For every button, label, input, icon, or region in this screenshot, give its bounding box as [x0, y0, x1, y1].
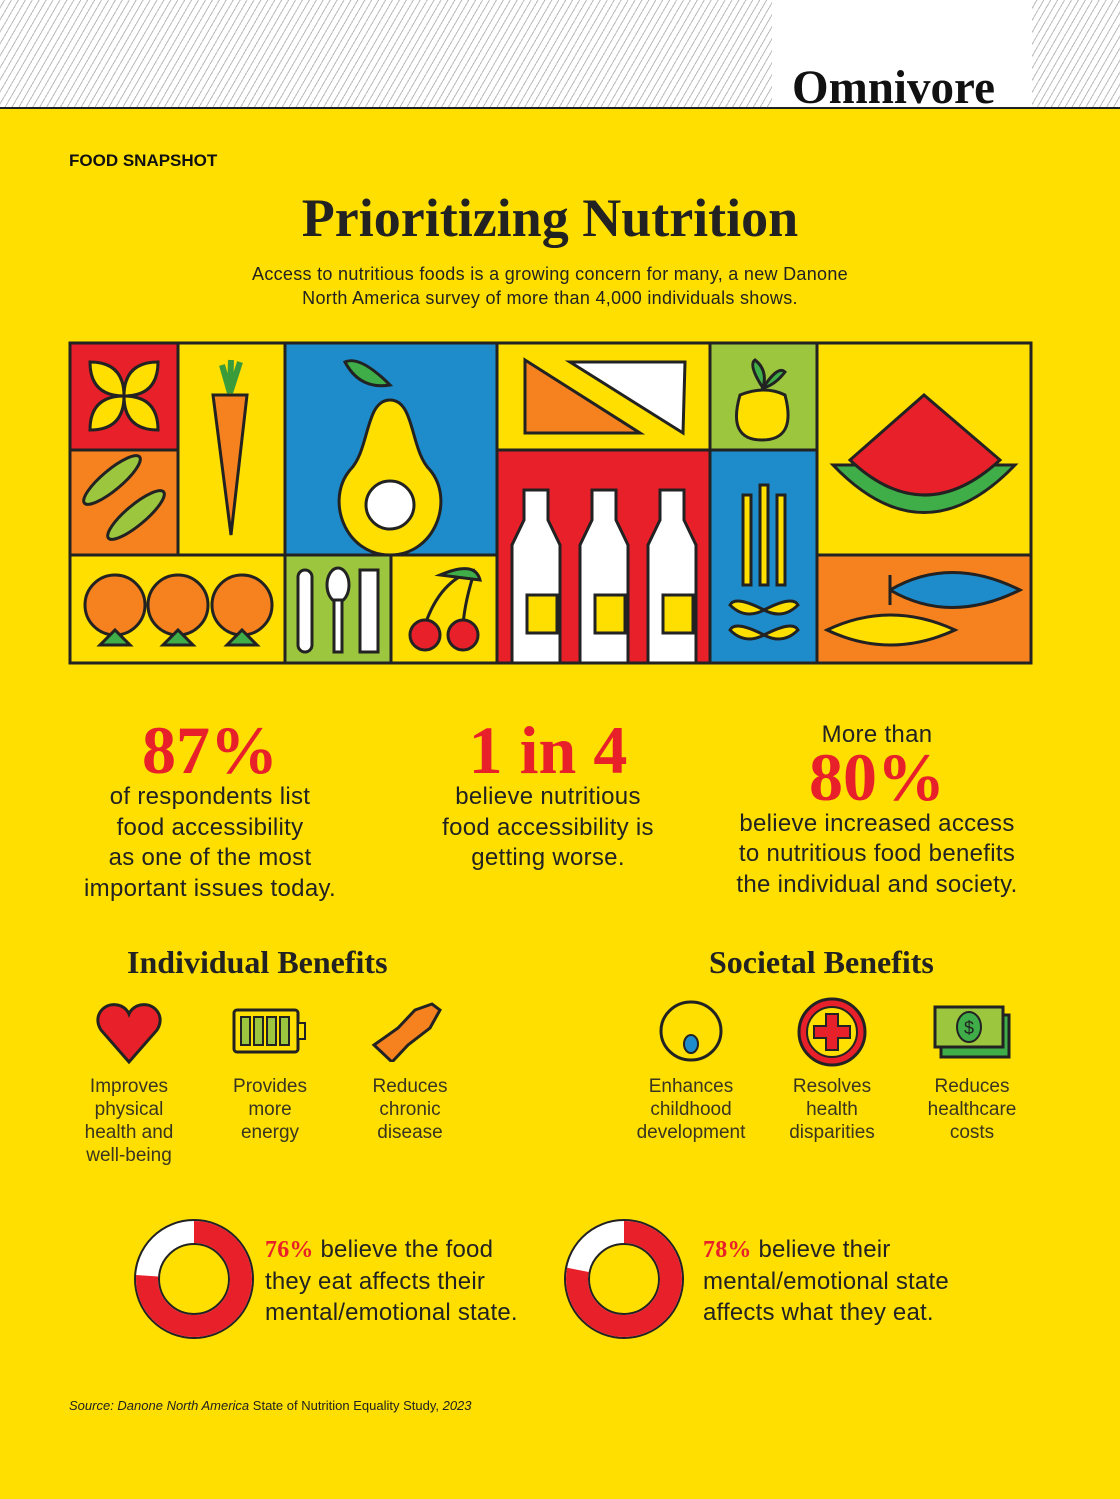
- heading: societal benefits: Societal Benefits: [709, 944, 934, 980]
- donut text 2: mental/emotional state: [703, 1268, 949, 1295]
- icon: battery: [232, 1008, 306, 1054]
- cheese: [525, 360, 640, 433]
- label: Improves physical health and well-being: [85, 1076, 173, 1166]
- icon: money: $: [964, 1018, 974, 1038]
- watermelon: [833, 465, 1015, 512]
- stat 3: More than: [822, 721, 932, 748]
- cherries: [425, 570, 475, 625]
- stat 2: [442, 712, 654, 871]
- bottles: [512, 490, 696, 663]
- title: Prioritizing Nutrition: [302, 188, 798, 248]
- label: Enhances childhood development: [637, 1076, 745, 1143]
- peas: [78, 449, 170, 546]
- label: Reduces chronic disease: [372, 1076, 448, 1143]
- source: Source: Danone North America State of Nutrition Equality Study, 2023: [69, 1398, 472, 1413]
- stat 3: 80%: [809, 738, 945, 814]
- label: Provides more energy: [233, 1076, 307, 1143]
- oranges: [85, 575, 272, 635]
- stat 1: food accessibility: [117, 814, 303, 840]
- carrot: [213, 395, 247, 535]
- icon: baby: [660, 1000, 722, 1062]
- stat 1: as one of the most: [109, 844, 311, 871]
- apple: [736, 390, 788, 440]
- label: Reduces healthcare costs: [928, 1076, 1016, 1143]
- stat 3: to nutritious food benefits: [739, 840, 1015, 867]
- stat 1: of respondents list: [110, 783, 310, 810]
- icon: medical cross: [798, 998, 866, 1066]
- label: Resolves health disparities: [789, 1076, 875, 1143]
- donut 76%: [134, 1219, 254, 1339]
- intro text: Access to nutritious foods is a growing concern for many, a new Danone North America survey of more than 4,000 individuals shows.: [252, 264, 848, 308]
- donut text 1: they eat affects their: [265, 1268, 485, 1295]
- donut text 1: [265, 1236, 518, 1326]
- food illustration grid: [68, 342, 1032, 664]
- stat 3: [736, 721, 1018, 898]
- utensils: [298, 568, 378, 652]
- stat 2: getting worse.: [471, 844, 625, 871]
- heading: individual benefits: Individual Benefits: [127, 944, 388, 980]
- masthead: Omnivore: [792, 61, 995, 114]
- pear: [339, 400, 441, 555]
- stat 2: 1 in 4: [469, 712, 627, 788]
- icon: hand: [372, 1002, 442, 1062]
- stat 3: believe increased access: [739, 810, 1015, 836]
- stat 1: 87%: [142, 712, 278, 788]
- stat 3: the individual and society.: [736, 870, 1018, 898]
- donut text 1: 76% believe the food: [265, 1236, 493, 1263]
- icon: heart: [96, 1003, 162, 1064]
- fish: [890, 572, 1020, 608]
- donut text 2: 78% believe their: [703, 1236, 890, 1263]
- header band: [0, 0, 1120, 109]
- donut text 1: mental/emotional state.: [265, 1299, 518, 1326]
- donut text 2: affects what they eat.: [703, 1299, 934, 1326]
- donut text 2: [703, 1236, 949, 1326]
- donut 78%: [564, 1219, 684, 1339]
- icon: money: [934, 1006, 1010, 1058]
- stat 2: believe nutritious: [455, 783, 641, 810]
- flower: [90, 362, 158, 430]
- stat 1: [84, 712, 336, 902]
- stat 1: important issues today.: [84, 874, 336, 902]
- stat 2: food accessibility is: [442, 814, 654, 840]
- section label: FOOD SNAPSHOT: [69, 151, 217, 170]
- wheat: [730, 485, 798, 639]
